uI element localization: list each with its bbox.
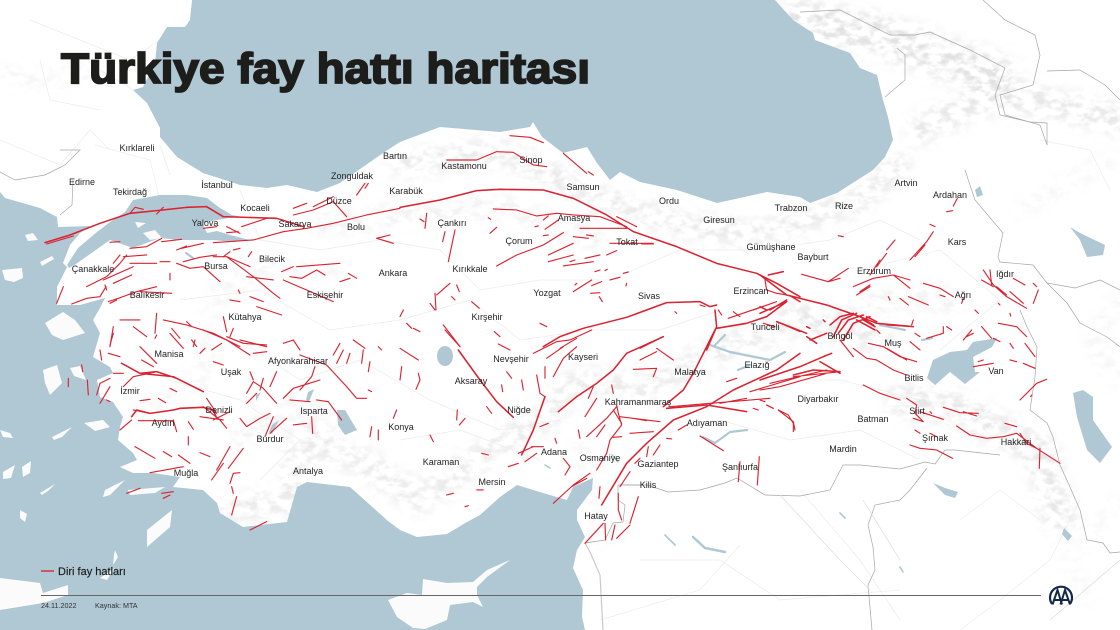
footer rule	[41, 594, 1041, 596]
source: Kaynak: MTA	[95, 601, 138, 610]
city labels: Malatya	[674, 367, 706, 377]
city labels: Adana	[541, 447, 567, 457]
city labels: Balıkesir	[130, 290, 164, 300]
legend: active fault lines: Diri fay hatları	[58, 566, 126, 578]
city labels: Çankırı	[437, 218, 467, 228]
city labels: Mardin	[829, 444, 857, 454]
city labels: Tokat	[616, 237, 638, 247]
city labels: Antalya	[293, 466, 323, 476]
city labels: Batman	[857, 414, 889, 424]
city labels: Burdur	[256, 434, 284, 444]
city labels: Sinop	[519, 155, 543, 165]
faults: eastern Anatolia	[760, 198, 1038, 380]
Sea of Marmara	[67, 195, 250, 268]
city labels: Manisa	[154, 349, 184, 359]
city labels: Edirne	[69, 177, 95, 187]
city labels: Afyonkarahisar	[268, 356, 328, 366]
city labels: Bolu	[347, 222, 365, 232]
faults: central Anatolia	[400, 136, 800, 350]
city labels: Hakkari	[1001, 437, 1031, 447]
city labels: Kayseri	[568, 352, 598, 362]
city labels: Hatay	[584, 511, 608, 521]
icon: AA logo	[1050, 587, 1072, 604]
city labels: Siirt	[909, 406, 925, 416]
city labels: Kastamonu	[441, 161, 487, 171]
city labels: Bursa	[204, 261, 228, 271]
city labels: Rize	[835, 201, 853, 211]
city labels: Diyarbakır	[797, 394, 839, 404]
city labels: Kars	[948, 237, 967, 247]
city labels: Iğdır	[996, 269, 1014, 279]
city labels: Aydın	[152, 418, 174, 428]
city labels: Bilecik	[259, 254, 285, 264]
city labels: Giresun	[703, 215, 735, 225]
city labels: Karabük	[389, 186, 423, 196]
city labels: Şırnak	[922, 433, 949, 443]
city labels: Uşak	[221, 367, 242, 377]
Aegean and Mediterranean islands	[0, 222, 172, 610]
city labels: Karaman	[423, 457, 459, 467]
city labels: Erzurum	[857, 266, 891, 276]
city labels: Bayburt	[797, 252, 829, 262]
city labels: Yozgat	[533, 288, 561, 298]
city labels: Ağrı	[955, 290, 971, 300]
city labels: Ankara	[379, 268, 407, 278]
city labels: Tunceli	[751, 322, 779, 332]
city labels: Düzce	[326, 196, 352, 206]
date: 24.11.2022	[41, 601, 76, 610]
city labels: Zonguldak	[331, 171, 374, 181]
city labels: İstanbul	[201, 180, 233, 190]
city labels: Adıyaman	[687, 418, 727, 428]
city labels: Niğde	[507, 405, 531, 415]
Aegean and Mediterranean Sea	[0, 192, 593, 630]
city labels: Sakarya	[278, 219, 312, 229]
active fault lines	[45, 136, 1060, 543]
city labels: Kahramanmaraş	[605, 397, 672, 407]
city labels: Kırklareli	[119, 143, 155, 153]
city labels	[69, 143, 1031, 521]
faults: East Anatolian zone and south	[400, 330, 800, 543]
city labels: Elazığ	[744, 360, 770, 370]
city labels: Ordu	[659, 196, 679, 206]
faults: south-east	[760, 370, 1060, 468]
city labels: Kütahya	[228, 312, 262, 322]
city labels: Kırıkkale	[452, 264, 488, 274]
faults: Marmara and north-west	[45, 183, 400, 347]
city labels: Tekirdağ	[113, 187, 147, 197]
city labels: Trabzon	[775, 203, 807, 213]
city labels: Kilis	[640, 480, 657, 490]
city labels: Çanakkale	[72, 264, 114, 274]
city labels: İzmir	[120, 386, 140, 396]
city labels: Samsun	[566, 182, 600, 192]
city labels: Yalova	[192, 218, 218, 228]
city labels: Mersin	[478, 477, 506, 487]
city labels: Konya	[388, 422, 414, 432]
city labels: Bingöl	[827, 331, 853, 341]
lakes and reservoirs	[186, 186, 1112, 572]
faults: Aegean and Mediterranean	[68, 330, 397, 530]
city labels: Erzincan	[733, 286, 769, 296]
Cyprus	[388, 560, 510, 629]
city labels: Bitlis	[904, 373, 924, 383]
title: Türkiye fay hattı haritası	[61, 45, 590, 93]
city labels: Muğla	[174, 468, 198, 478]
city labels: Gaziantep	[637, 459, 679, 469]
city labels: Denizli	[205, 405, 233, 415]
city labels: Sivas	[638, 291, 660, 301]
city labels: Eskişehir	[307, 290, 343, 300]
city labels: Aksaray	[455, 376, 488, 386]
city labels: Amasya	[558, 213, 590, 223]
city labels: Isparta	[300, 406, 328, 416]
city labels: Şanlıurfa	[722, 462, 758, 472]
city labels: Kocaeli	[240, 203, 270, 213]
city labels: Artvin	[894, 178, 918, 188]
city labels: Osmaniye	[580, 453, 620, 463]
city labels: Van	[988, 366, 1004, 376]
city labels: Nevşehir	[493, 354, 529, 364]
Black Sea	[133, 0, 893, 203]
city labels: Ardahan	[933, 190, 967, 200]
city labels: Bartın	[383, 151, 407, 161]
city labels: Çorum	[505, 236, 533, 246]
city labels: Muş	[884, 338, 902, 348]
city labels: Kırşehir	[471, 312, 503, 322]
city labels: Gümüşhane	[746, 242, 796, 252]
